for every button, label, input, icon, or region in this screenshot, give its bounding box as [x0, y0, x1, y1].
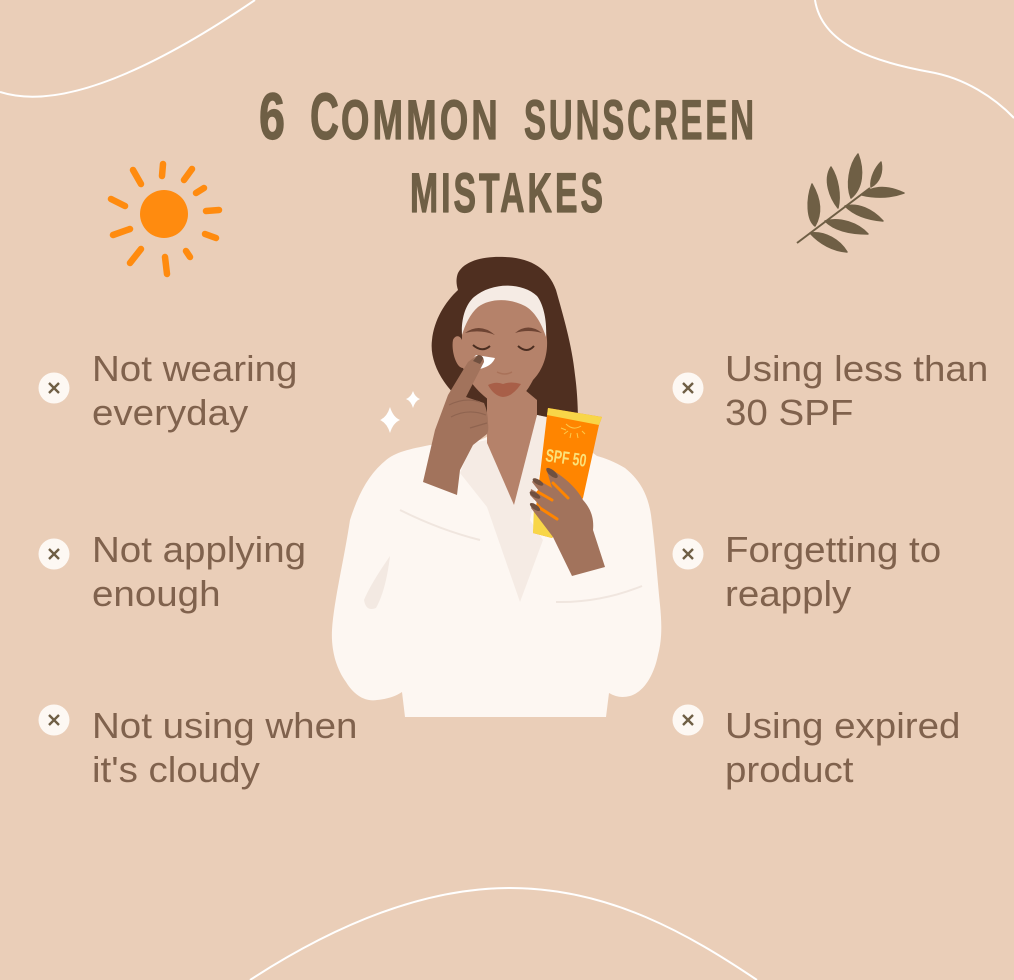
title: SUNSCREEN	[524, 88, 757, 151]
sunscreen tube	[533, 408, 602, 538]
holding hand	[529, 466, 605, 576]
item: forgetting to reapply: Forgetting to	[725, 529, 941, 570]
item: not wearing everyday: Not wearing	[92, 348, 297, 389]
robe fold lines	[364, 510, 642, 609]
item: not wearing everyday: everyday	[92, 392, 249, 433]
item: not applying enough	[38, 529, 306, 614]
icon: sun	[111, 164, 219, 274]
SPF label: SPF 50	[544, 445, 588, 471]
title: C	[310, 79, 339, 153]
item: using less than 30 SPF: 30 SPF	[725, 392, 853, 433]
item: using less than 30 SPF	[672, 348, 988, 433]
item: not applying enough: enough	[92, 573, 220, 614]
item: forgetting to reapply: reapply	[725, 573, 852, 614]
item: using expired product	[672, 704, 960, 790]
item: not using when cloudy: Not using when	[92, 705, 357, 746]
title: OMMON	[341, 88, 501, 151]
robe	[332, 415, 661, 717]
hair	[432, 257, 578, 425]
icon: leaf branch	[797, 154, 904, 252]
title: 6	[259, 79, 285, 153]
face	[453, 298, 547, 404]
cream	[471, 355, 495, 369]
item: not using when cloudy: it's cloudy	[92, 749, 260, 790]
title: MISTAKES	[410, 161, 606, 224]
item: not using when cloudy	[38, 704, 357, 790]
facial features	[465, 328, 542, 397]
illustration: woman applying sunscreen	[332, 257, 661, 717]
raised hand	[423, 355, 488, 495]
item: forgetting to reapply	[672, 529, 941, 614]
sparkles	[380, 391, 420, 433]
neck	[487, 385, 537, 505]
item: not wearing everyday	[38, 348, 297, 433]
item: using less than 30 SPF: Using less than	[725, 348, 988, 389]
item: not applying enough: Not applying	[92, 529, 306, 570]
item: using expired product: product	[725, 749, 854, 790]
headband	[462, 286, 546, 337]
title	[259, 79, 757, 224]
collar	[460, 415, 547, 602]
item: using expired product: Using expired	[725, 705, 960, 746]
